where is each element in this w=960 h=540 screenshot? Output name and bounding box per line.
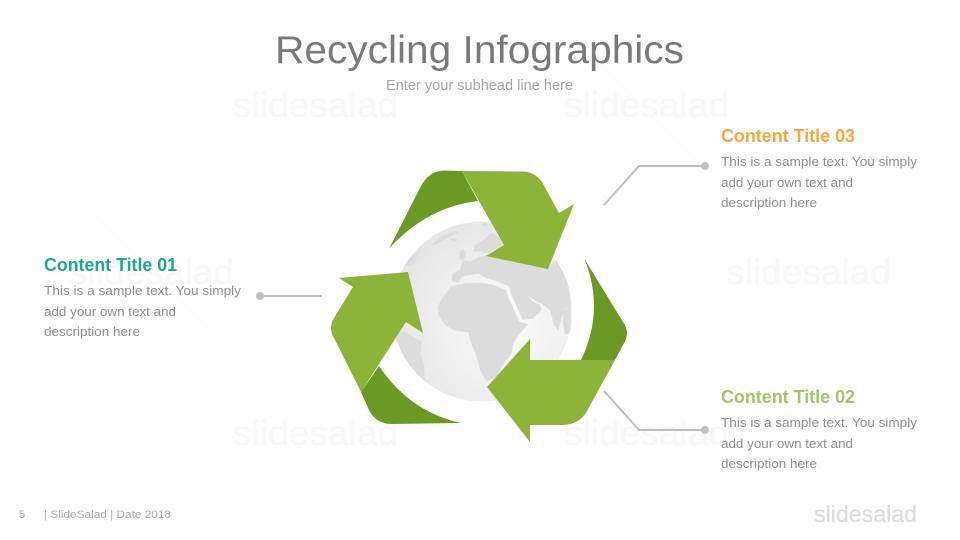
text block: content 02 xyxy=(721,387,918,471)
title: Recycling Infographics xyxy=(275,29,684,72)
text block: content 01: description here xyxy=(44,324,140,339)
arrow: right recycling arrow xyxy=(487,259,627,442)
watermark pattern: slidesalad xyxy=(69,253,234,292)
text block: content 01: Content Title 01 xyxy=(44,255,177,275)
text block: content 03 xyxy=(721,126,918,210)
watermark pattern: slidesalad xyxy=(233,414,398,453)
recycling globe graphic xyxy=(331,170,627,442)
text block: content 02: add your own text and xyxy=(721,436,853,451)
footer: date line: | SlideSalad | Date 2018 xyxy=(44,509,171,521)
text block: content 03: description here xyxy=(721,195,817,210)
text block: content 03: This is a sample text. You simply xyxy=(721,154,918,169)
connector: title 03 xyxy=(604,162,709,205)
connector: title 02 xyxy=(604,391,709,434)
text block: content 02: Content Title 02 xyxy=(721,387,855,407)
text block: content 01: add your own text and xyxy=(44,304,176,319)
arrow: top recycling arrow xyxy=(389,170,574,269)
footer: page number: 5 xyxy=(19,509,25,521)
text block: content 03: Content Title 03 xyxy=(721,126,855,146)
icon: globe xyxy=(392,222,572,402)
watermark pattern xyxy=(69,50,891,492)
text block: content 01: This is a sample text. You simply xyxy=(44,283,242,298)
watermark pattern: slidesalad xyxy=(233,86,398,125)
connector: title 01 xyxy=(256,292,322,300)
subhead: Enter your subhead line here xyxy=(386,78,573,94)
arrow: left recycling arrow xyxy=(331,272,461,424)
watermark pattern: slidesalad xyxy=(726,253,891,292)
watermark pattern: slidesalad xyxy=(564,86,729,125)
watermark pattern: slidesalad xyxy=(564,414,729,453)
text block: content 02: This is a sample text. You simply xyxy=(721,415,918,430)
text block: content 02: description here xyxy=(721,456,817,471)
text block: content 03: add your own text and xyxy=(721,175,853,190)
text block: content 01 xyxy=(44,255,242,339)
footer: logo: slidesalad xyxy=(814,501,917,527)
